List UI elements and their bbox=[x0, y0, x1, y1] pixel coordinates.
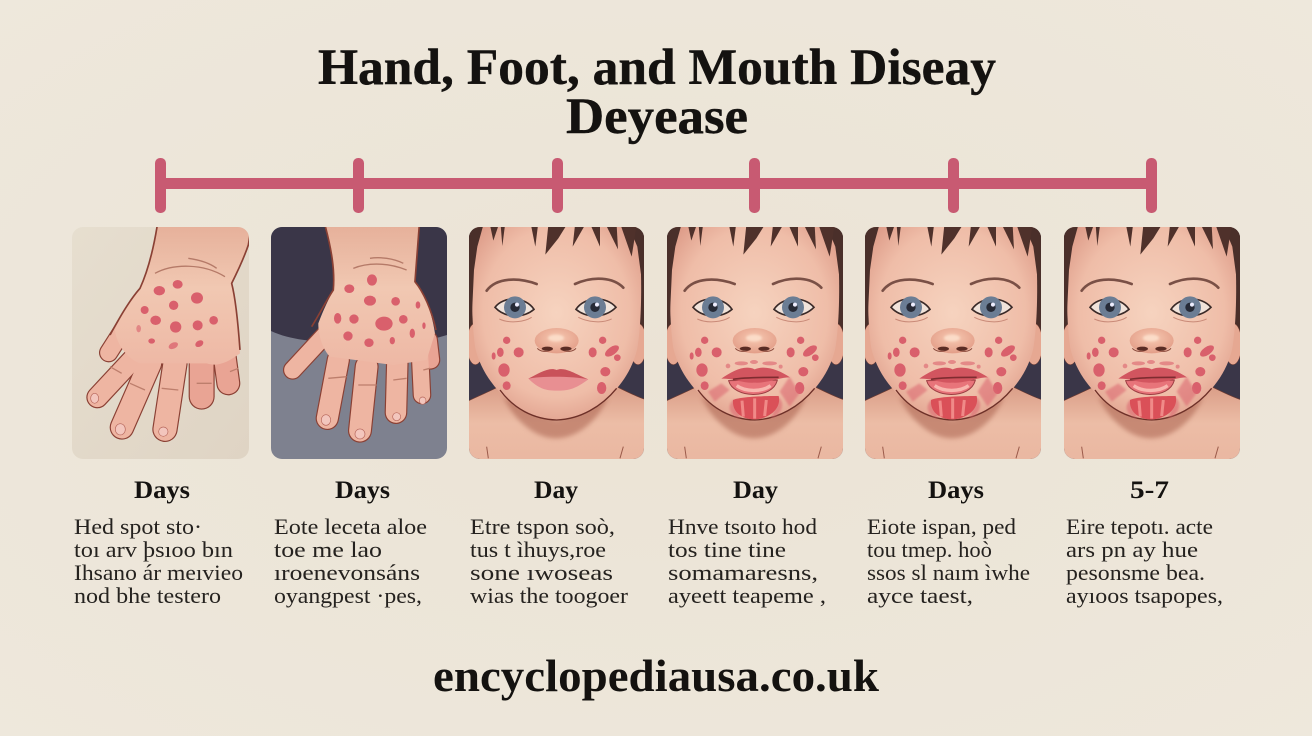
column two text bbox=[274, 477, 427, 608]
column five text: ssos sl naım ìwhe bbox=[867, 560, 1030, 585]
column one text: nod bhe testero bbox=[74, 583, 221, 608]
column four text: Hnve tsoıto hod bbox=[668, 514, 817, 539]
column six text: ars pn ay hue bbox=[1066, 537, 1198, 562]
column four text: somamaresns, bbox=[668, 560, 818, 585]
column five text: ayce taest, bbox=[867, 583, 973, 608]
column two text: ıroenevonsáns bbox=[274, 560, 420, 585]
column five text: tou tmep. hoò bbox=[867, 537, 992, 562]
column six text: ayıoos tsapopes, bbox=[1066, 583, 1223, 608]
column six text: Eire tepotı. acte bbox=[1066, 514, 1213, 539]
column five text: Eiote ispan, ped bbox=[867, 514, 1016, 539]
column four text: tos tine tine bbox=[668, 537, 786, 562]
column six text bbox=[1066, 477, 1223, 608]
column three text: sone ıwoseas bbox=[470, 560, 613, 585]
column five text bbox=[867, 477, 1030, 608]
column four text bbox=[668, 477, 826, 608]
panel: face with mouth sores, stage five bbox=[863, 225, 1043, 462]
title: Hand, Foot, and Mouth Diseay bbox=[318, 40, 996, 96]
column two text: Eote leceta aloe bbox=[274, 514, 427, 539]
panel: hand stage one bbox=[72, 225, 252, 459]
column four text: Day bbox=[733, 477, 779, 504]
column one text: Hed spot sto· bbox=[74, 514, 202, 539]
column three text: tus t ìhuys,roe bbox=[470, 537, 606, 562]
column three text: Day bbox=[534, 477, 579, 504]
column two text: oyangpest ·pes, bbox=[274, 583, 422, 608]
panel: face with mouth sores, stage four bbox=[665, 225, 845, 462]
column four text: ayeett teapeme , bbox=[668, 583, 826, 608]
column two text: toe me lao bbox=[274, 537, 382, 562]
panel: face with cheek spots bbox=[467, 225, 647, 462]
title bbox=[318, 40, 996, 145]
column one text: toı arv þsıoo bın bbox=[74, 537, 233, 562]
column six text: pesonsme bea. bbox=[1066, 560, 1205, 585]
column three text: Etre tspon soò, bbox=[470, 514, 615, 539]
column three text: wias the toogoer bbox=[470, 583, 629, 608]
column one text bbox=[74, 477, 243, 608]
column two text: Days bbox=[335, 477, 390, 504]
panel: face with mouth sores, stage six bbox=[1062, 225, 1242, 462]
timeline bbox=[155, 158, 1157, 213]
column five text: Days bbox=[928, 477, 984, 504]
footer website: encyclopediausa.co.uk bbox=[433, 650, 879, 701]
column six text: 5-7 bbox=[1130, 477, 1169, 504]
title: Deyease bbox=[566, 89, 748, 145]
column three text bbox=[470, 477, 629, 608]
column one text: Days bbox=[134, 477, 190, 504]
column one text: Ihsano ár meıvieo bbox=[74, 560, 243, 585]
panel: hand stage two bbox=[271, 225, 447, 459]
